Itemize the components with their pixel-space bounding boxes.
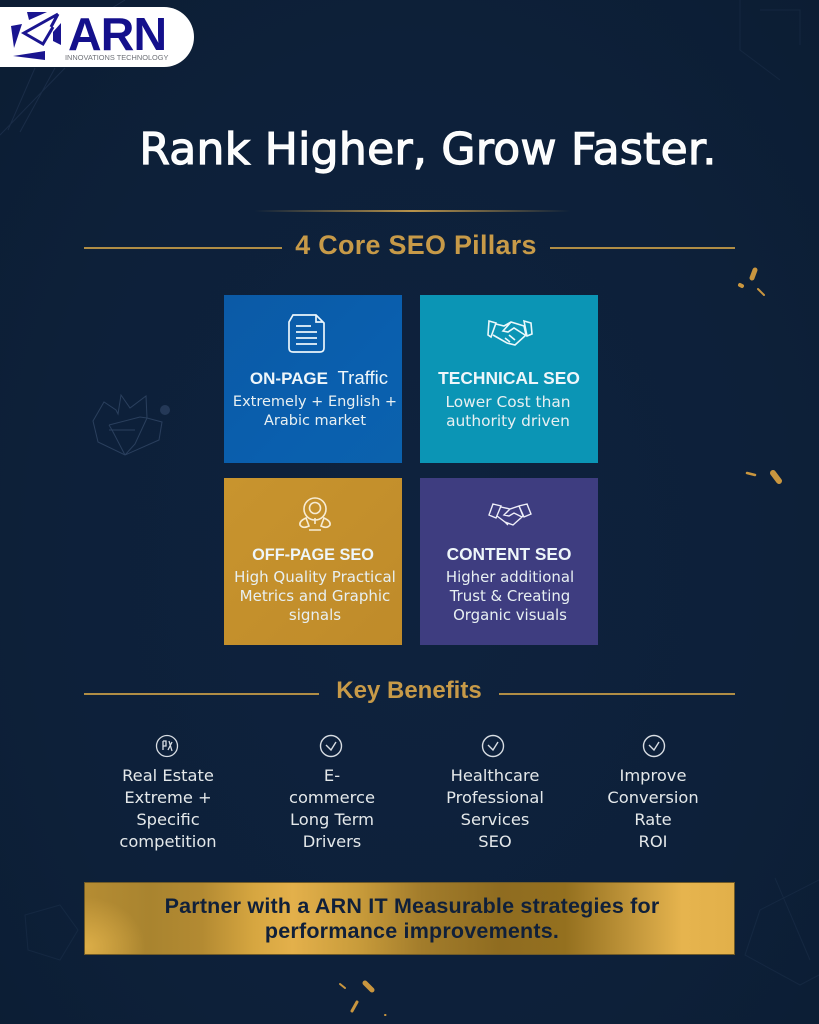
icon: check (642, 734, 666, 758)
body text: Metrics and Graphic (240, 587, 390, 605)
text: Healthcare (451, 766, 539, 785)
heading: CONTENT SEO (447, 544, 571, 564)
banner text (165, 894, 659, 942)
text: Services (461, 810, 529, 829)
icon: circle badge (156, 734, 178, 758)
body text (233, 394, 397, 429)
panel: off-page (224, 478, 402, 645)
text: Conversion (607, 788, 699, 807)
benefit: healthcare (446, 734, 544, 851)
text: competition (119, 832, 217, 851)
text (446, 766, 544, 851)
icon: check (320, 734, 342, 758)
text: E- (324, 766, 340, 785)
text: ROI (639, 832, 667, 851)
text: Professional (446, 788, 544, 807)
icon: logo mark (11, 12, 61, 60)
text (607, 766, 699, 851)
body text: Extremely + English + (233, 394, 397, 410)
benefit: real estate (119, 734, 217, 851)
heading rule left (84, 693, 319, 694)
body text (446, 568, 574, 624)
heading: OFF-PAGE SEO (252, 546, 374, 564)
text (289, 766, 375, 851)
text: Improve (620, 766, 686, 785)
heading: ON-PAGE Traffic (250, 367, 388, 388)
banner text: performance improvements. (265, 918, 559, 942)
heading: TECHNICAL SEO (438, 368, 580, 388)
text: Rate (634, 810, 672, 829)
text: Extreme + (124, 788, 212, 807)
body text (234, 568, 396, 624)
heading rule right (499, 693, 735, 694)
heading: key benefits: Key Benefits (336, 677, 482, 704)
icon: check (482, 734, 504, 758)
title divider (255, 210, 570, 212)
body text: Arabic market (264, 413, 366, 429)
text: Specific (136, 810, 200, 829)
body text: Higher additional (446, 568, 574, 586)
heading rule left (84, 247, 282, 248)
body text: Trust & Creating (450, 587, 570, 605)
panel: technical (420, 295, 598, 463)
body text: Organic visuals (453, 606, 567, 624)
body text: High Quality Practical (234, 568, 396, 586)
panel: content (420, 478, 598, 645)
panel: on-page (224, 295, 402, 463)
text (119, 766, 217, 851)
title: Rank Higher, Grow Faster. (139, 124, 717, 175)
text: Drivers (303, 832, 361, 851)
logo tagline: INNOVATIONS TECHNOLOGY (65, 53, 168, 62)
body text: signals (289, 606, 341, 624)
body text (445, 393, 571, 430)
call-to-action banner (84, 882, 735, 955)
heading: 4 core SEO pillars: 4 Core SEO Pillars (295, 230, 537, 260)
icon: document (288, 314, 325, 353)
benefit: e-commerce (289, 734, 375, 851)
body text: authority driven (446, 412, 570, 430)
icon: handshake (488, 503, 532, 526)
heading rule right (550, 247, 735, 248)
logo badge (0, 7, 194, 67)
banner text: Partner with a ARN IT Measurable strategies for (165, 894, 659, 918)
icon: badge (299, 497, 331, 531)
text: SEO (478, 832, 512, 851)
text: Long Term (290, 810, 374, 829)
text: commerce (289, 788, 375, 807)
logo wordmark: ARN (68, 8, 166, 60)
icon: handshake (487, 320, 533, 346)
body text: Lower Cost than (445, 393, 571, 411)
benefit: conversion (607, 734, 699, 851)
text: Real Estate (122, 766, 214, 785)
